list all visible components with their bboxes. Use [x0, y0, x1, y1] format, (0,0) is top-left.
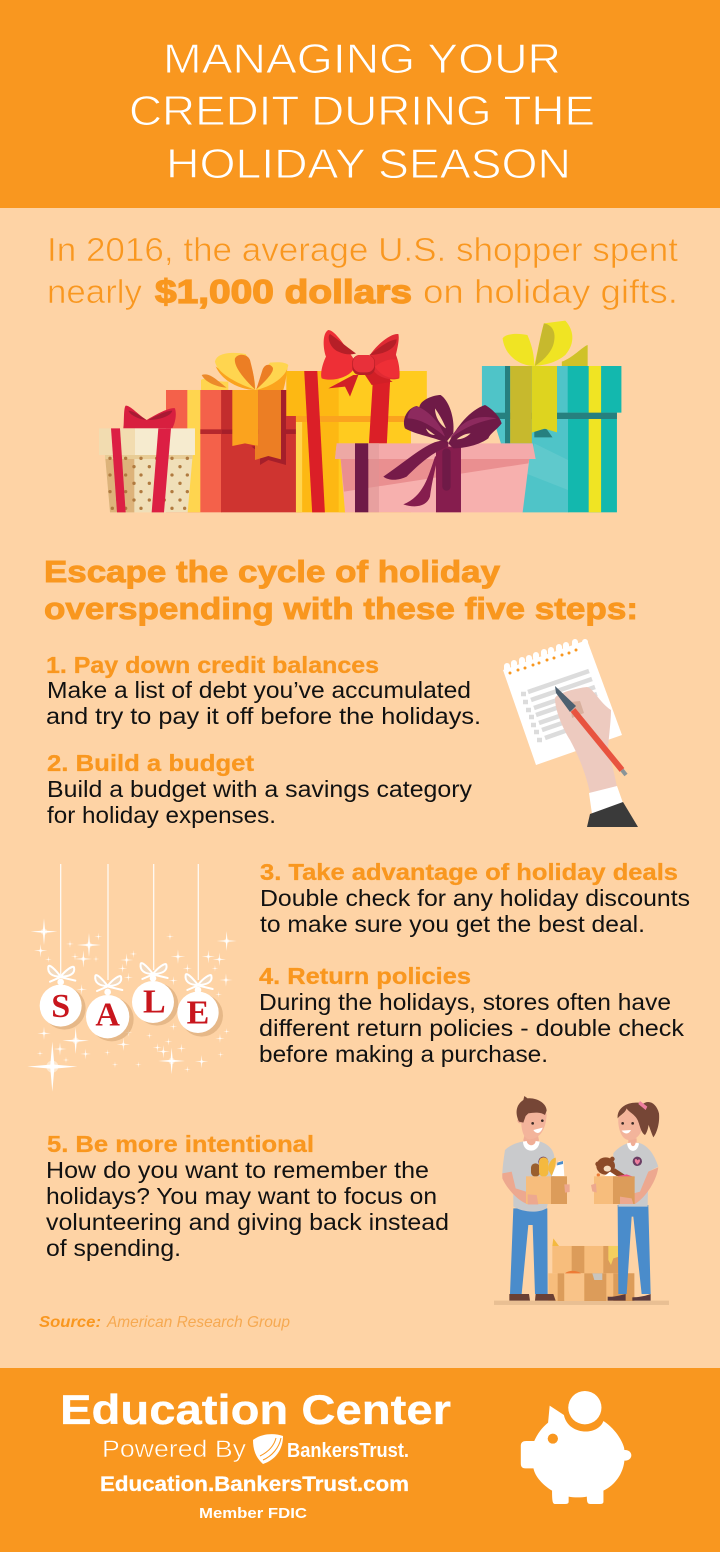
website address: Education.BankersTrust.com	[100, 1473, 409, 1496]
sparkles	[27, 918, 237, 1092]
step 1	[46, 652, 481, 729]
powered by line	[102, 1434, 409, 1464]
step 5: of spending.	[46, 1235, 181, 1261]
ornament: L: L	[143, 984, 166, 1021]
step 3: to make sure you get the best deal.	[260, 911, 645, 937]
heading: five steps	[44, 554, 638, 626]
step 3: 3. Take advantage of holiday deals	[260, 859, 678, 885]
title: MANAGING YOUR	[163, 35, 561, 82]
ornament: L	[132, 963, 174, 1023]
donation box pile	[548, 1238, 634, 1301]
red bow	[321, 330, 400, 397]
gift: teal box	[482, 321, 621, 512]
hand	[555, 687, 617, 793]
source line: American Research Group	[106, 1314, 290, 1331]
illustration: SALE ornaments	[27, 864, 237, 1092]
teddy bear	[595, 1157, 635, 1184]
step 4: different return policies - double check	[259, 1015, 685, 1041]
step 2: for holiday expenses.	[47, 802, 276, 828]
illustration: stack of gifts	[99, 321, 621, 512]
step 2	[47, 750, 473, 828]
icon: piggy bank	[521, 1391, 631, 1504]
groceries	[531, 1157, 564, 1177]
title: HOLIDAY SEASON	[166, 140, 571, 187]
header band	[0, 0, 720, 208]
finger shade	[570, 701, 584, 718]
step 1: 1. Pay down credit balances	[46, 652, 379, 678]
ornament: A: A	[95, 997, 120, 1034]
step 1: Make a list of debt you’ve accumulated	[47, 677, 471, 703]
powered by line: Powered By	[102, 1436, 246, 1463]
jacket sleeve	[587, 802, 638, 827]
ground	[494, 1301, 669, 1305]
step 3	[260, 859, 690, 937]
volunteer: man	[502, 1096, 570, 1301]
gift: red box	[166, 353, 302, 512]
intro statement: $1,000 dollars	[155, 273, 412, 310]
footer band	[0, 1368, 720, 1552]
shirt cuff	[589, 786, 623, 814]
step 1: and try to pay it off before the holidays.	[46, 703, 481, 729]
intro statement	[47, 231, 678, 310]
volunteer: woman	[591, 1101, 659, 1301]
member FDIC: Member FDIC	[199, 1505, 307, 1522]
title: CREDIT DURING THE	[129, 87, 595, 134]
step 5	[46, 1131, 449, 1261]
heading: five steps: overspending with these five steps:	[44, 591, 638, 626]
ornament shadows	[43, 983, 223, 1041]
step 5: holidays? You may want to focus on	[46, 1183, 437, 1209]
ornament: S: S	[51, 988, 70, 1025]
heading: five steps: Escape the cycle of holiday	[44, 554, 501, 589]
ornament: A	[86, 975, 129, 1038]
strings	[61, 864, 198, 980]
step 4: During the holidays, stores often have	[259, 989, 671, 1015]
step 4	[259, 963, 685, 1067]
intro statement: on holiday gifts.	[423, 273, 678, 310]
step 3: Double check for any holiday discounts	[260, 885, 690, 911]
powered by line: BankersTrust.	[287, 1440, 409, 1462]
intro statement: nearly	[47, 273, 143, 310]
icon: bank shield logo	[253, 1434, 283, 1464]
gift: yellow box	[286, 371, 427, 512]
step 4: 4. Return policies	[259, 963, 471, 989]
ornament: E: E	[187, 994, 209, 1031]
step 5: How do you want to remember the	[46, 1157, 429, 1183]
illustration: hand writing a list	[503, 640, 638, 827]
step 4: before making a purchase.	[259, 1041, 548, 1067]
pen	[555, 686, 626, 775]
step 5: 5. Be more intentional	[47, 1131, 314, 1157]
step 2: 2. Build a budget	[47, 750, 254, 776]
notepad	[503, 640, 622, 765]
intro statement: In 2016, the average U.S. shopper spent	[47, 231, 678, 268]
purple bow	[383, 395, 502, 506]
footer title: Education Center	[60, 1386, 451, 1433]
title	[129, 35, 595, 187]
ornament: S	[40, 966, 82, 1027]
source line: Source:	[39, 1314, 101, 1331]
ornament: E	[177, 974, 219, 1033]
gift: pink box	[335, 395, 536, 512]
illustration: volunteers with donation boxes	[494, 1096, 669, 1305]
step 2: Build a budget with a savings category	[47, 776, 473, 802]
step 5: volunteering and giving back instead	[46, 1209, 449, 1235]
gift: polka dot box	[99, 406, 195, 512]
